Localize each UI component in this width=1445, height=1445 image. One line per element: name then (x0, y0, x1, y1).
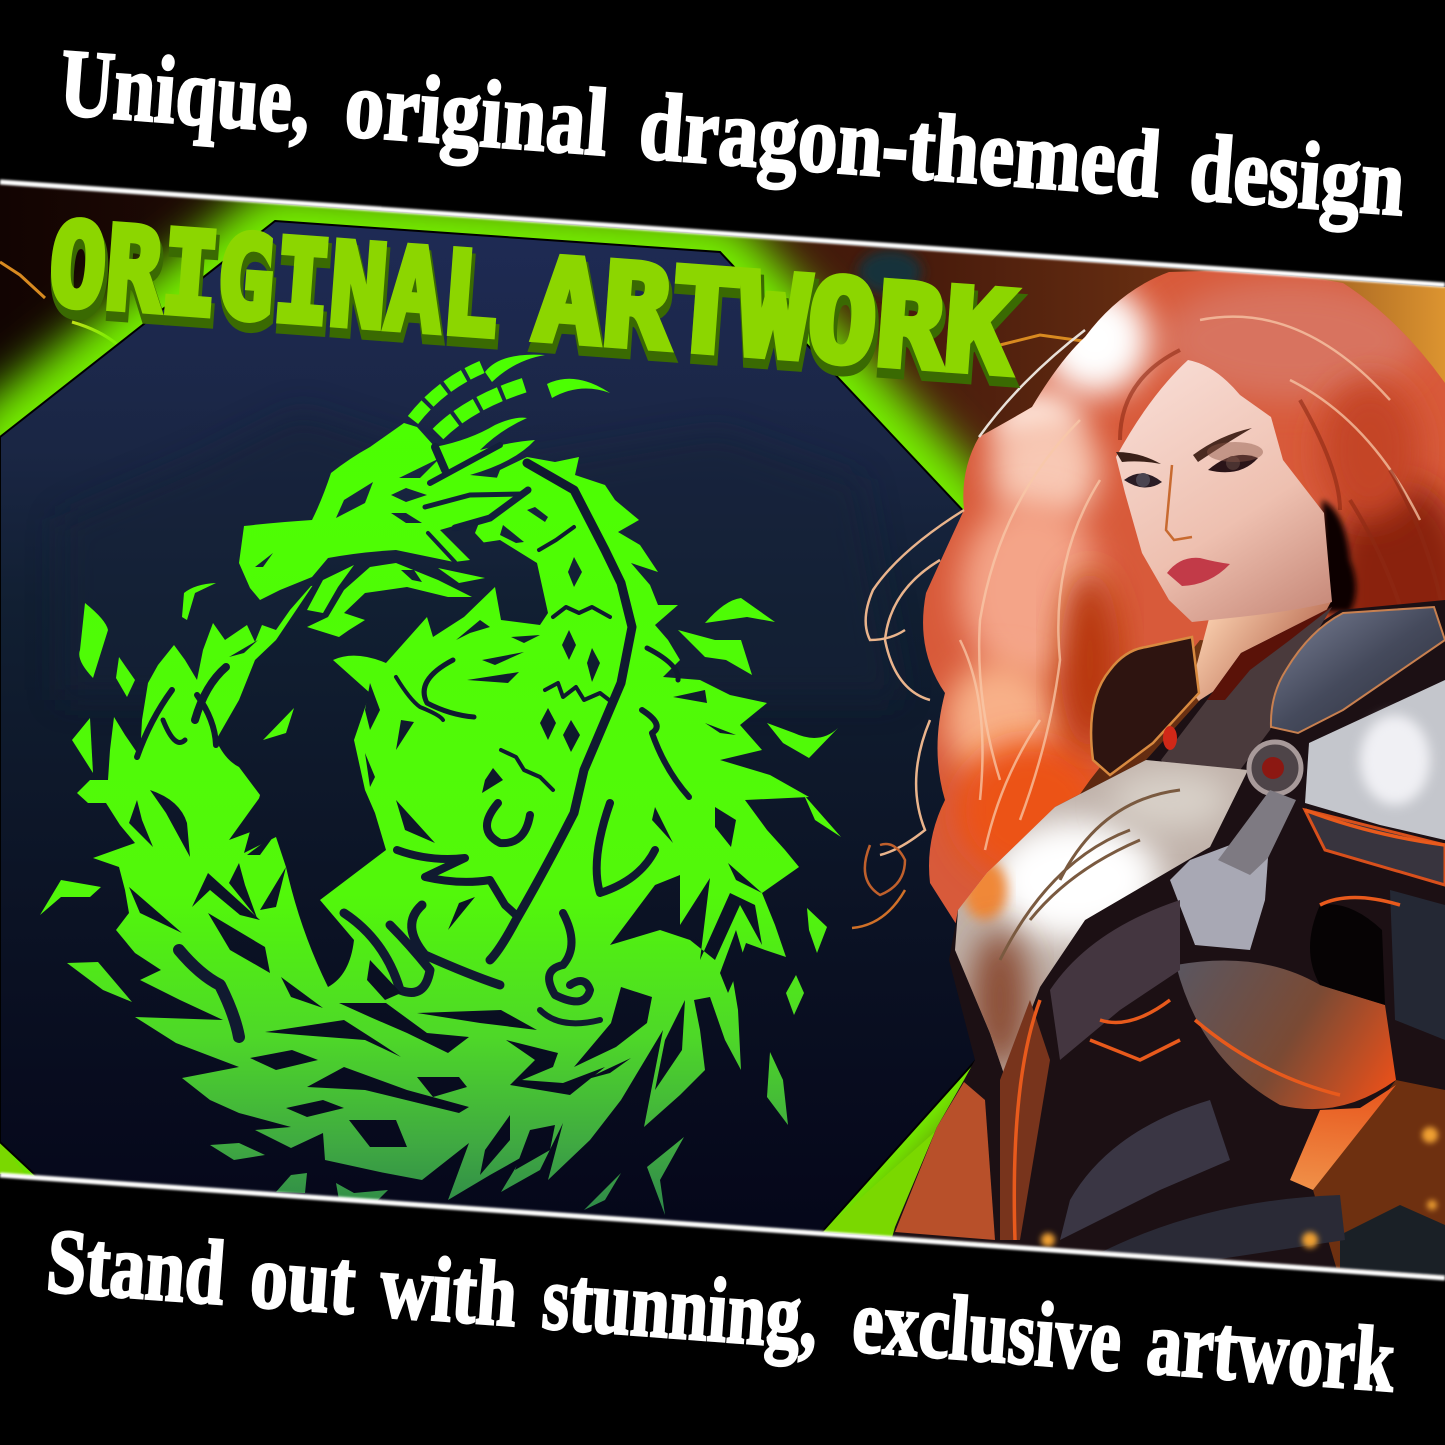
bright green lower right wedge (824, 1132, 998, 1244)
green glow behind panel (0, 221, 985, 1232)
lower plate bracer (1176, 960, 1396, 1109)
central hole (216, 540, 548, 987)
silver pauldron (1305, 680, 1445, 840)
top caption: dragon-themed (636, 72, 1164, 218)
head (239, 418, 535, 600)
torso base (880, 600, 1445, 1280)
orange rim lights (1014, 810, 1445, 1240)
neck pattern (482, 507, 600, 793)
bottom caption: with (377, 1234, 521, 1346)
black underarm (1310, 904, 1385, 1005)
band background: fiery sky (0, 170, 1445, 1290)
collar plate (1091, 637, 1199, 775)
top caption: original (342, 50, 612, 176)
heading shadow: ORIGINAL (46, 205, 505, 371)
heading shadow: ARTWORK (531, 241, 1020, 409)
loose hair wisps (852, 330, 1085, 928)
hair strands (960, 317, 1420, 850)
inner flame cutouts (129, 620, 762, 1175)
head spike lines (425, 445, 528, 562)
top caption (56, 28, 1409, 236)
right side armor (1390, 890, 1445, 1040)
bottom caption: exclusive (849, 1269, 1125, 1391)
neck lines (137, 463, 689, 1037)
lips (1167, 558, 1230, 586)
loose flame sparks (40, 583, 841, 1215)
bottom caption (44, 1209, 1399, 1411)
neck shadow (1322, 500, 1356, 612)
nose (1166, 465, 1192, 540)
arm (1290, 1085, 1396, 1190)
woman in armor (852, 260, 1445, 1280)
neck (1196, 600, 1332, 701)
ember sparks (1041, 1127, 1438, 1248)
chest shadow (1050, 900, 1180, 1060)
belt (1090, 1195, 1345, 1265)
diagonal strap (1218, 790, 1296, 875)
shoulder gem (1249, 742, 1301, 794)
top caption: Unique, (56, 28, 315, 154)
heading face: ARTWORK (530, 233, 1019, 401)
picture band (0, 170, 1445, 1290)
chest filigree center (1170, 830, 1270, 950)
jaw flames (307, 563, 485, 637)
panel shading patches (60, 410, 900, 700)
heading: original artwork (44, 197, 1021, 409)
bright green lower left wedge (0, 1144, 24, 1174)
cracks in sky (0, 262, 1090, 345)
band white edges (0, 182, 1445, 1278)
dark red collar lining (1207, 607, 1332, 700)
eyes and brows (1116, 428, 1263, 488)
heading face (45, 197, 1019, 401)
pauldron highlight (1360, 715, 1430, 805)
flame mass (77, 457, 809, 1200)
hair (923, 271, 1445, 924)
face (1116, 360, 1332, 622)
lower dress plate (1060, 1100, 1230, 1240)
collar (1161, 607, 1332, 770)
bottom caption: out (247, 1224, 360, 1334)
upper shoulder plate (1271, 607, 1445, 733)
silver chest plate (940, 750, 1260, 1090)
dark rocks at lower right (1340, 1205, 1445, 1280)
horns (413, 355, 610, 434)
dragon emblem (40, 355, 841, 1215)
bottom caption: Stand (44, 1209, 229, 1324)
bottom caption: stunning, (539, 1246, 822, 1368)
heading face: ORIGINAL (45, 197, 504, 363)
head cutouts (255, 458, 440, 567)
lower right embers (1313, 1080, 1445, 1268)
heading shadow (46, 205, 1020, 409)
dark panel (0, 221, 985, 1234)
teal blotch in sky (858, 250, 922, 294)
lower left fauld (895, 1082, 995, 1240)
collar gem (1163, 726, 1177, 750)
armor band (1305, 810, 1445, 885)
